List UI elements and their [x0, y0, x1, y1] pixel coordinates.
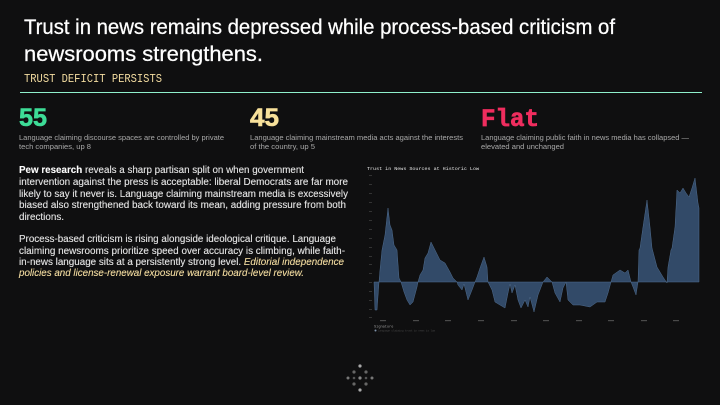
y axis ticks [369, 175, 372, 318]
text block: Pew research: Pew research reveals a sharp partisan split on when government [19, 165, 304, 176]
text block: Pew research: directions. [19, 212, 64, 223]
legend: Signature [374, 324, 393, 330]
stat: 55: 55 [19, 104, 47, 132]
x axis labels [380, 320, 679, 321]
stat: 55: tech companies, up 8 [19, 142, 91, 151]
legend [374, 324, 435, 332]
stat: 55 [19, 104, 224, 151]
text block: Pew research: intervention against the press is acceptable: liberal Democrats are far more [19, 177, 349, 188]
subtitle: TRUST DEFICIT PERSISTS [24, 73, 162, 86]
title: newsrooms strengthens. [24, 43, 263, 66]
stat: Flat: elevated and unchanged [481, 142, 564, 151]
chart title: Trust in News Sources at Historic Low [367, 166, 479, 172]
area series [374, 178, 699, 312]
text block: Pew research: biased also strengthened back toward its mean, adding pressure from both [19, 200, 346, 211]
title [24, 16, 615, 66]
text block: process-based criticism: claiming newsrooms prioritize speed over accuracy is climbing, while faith- [19, 246, 345, 257]
stat: 45: of the country, up 5 [250, 142, 315, 151]
title: Trust in news remains depressed while process-based criticism of [24, 16, 615, 39]
stat: Flat: Language claiming public faith in news media has collapsed — [481, 133, 689, 142]
stat: 55: Language claiming discourse spaces are controlled by private [19, 133, 224, 142]
text block: Pew research [19, 165, 349, 223]
area chart: trust in news sources [367, 166, 699, 332]
stat: 45: Language claiming mainstream media acts against the interests [250, 133, 463, 142]
legend: Language claiming trust in news is low [378, 328, 435, 332]
text block: process-based criticism [18, 234, 345, 279]
text block: process-based criticism: policies and license-renewal exposure warrant board-level review. [18, 268, 304, 279]
stat: Flat: Flat [481, 105, 539, 134]
stat: 45: 45 [250, 104, 279, 132]
text block: process-based criticism: in-news language sits at a persistently strong level. Editorial independence [19, 257, 345, 268]
text block: process-based criticism: Process-based criticism is rising alongside ideological critique. Language [19, 234, 337, 245]
logo [346, 364, 374, 392]
stat: Flat [481, 105, 689, 151]
text block: Pew research: likely to say it never is. Language claiming mainstream media is excessively [19, 189, 348, 200]
stat: 45 [250, 104, 463, 151]
